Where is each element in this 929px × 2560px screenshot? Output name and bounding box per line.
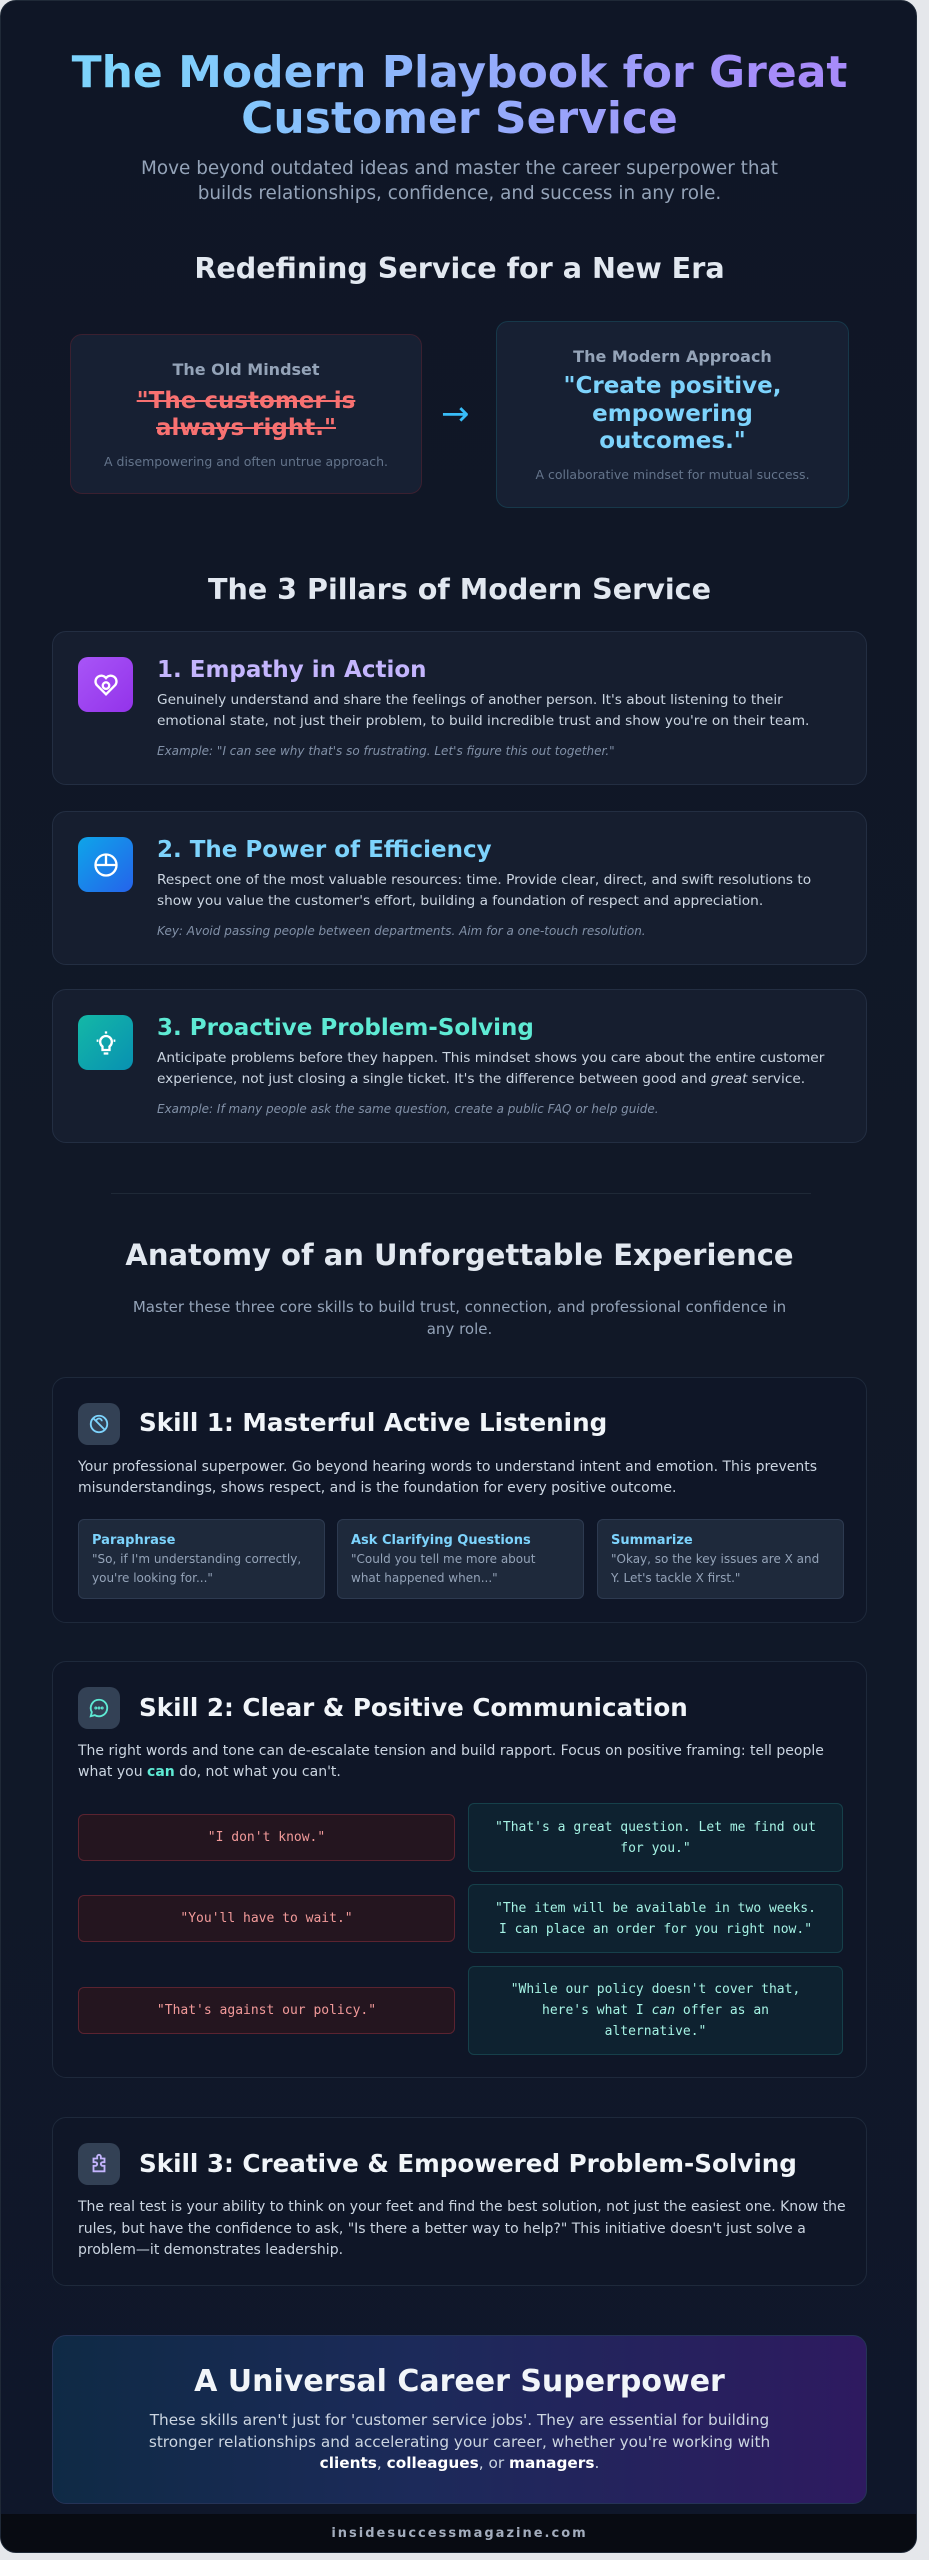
box: paraphrase: Paraphrase [92,1533,175,1548]
panel: pillar 2: Respect one of the most valuable resources: time. Provide clear, direct, and swift resolutions to show you value the customer's effort, building a foundation of respect and appreciation. [157,872,811,909]
title: Customer Service [241,93,678,144]
subtitle: Move beyond outdated ideas and master the career superpower that [141,158,778,179]
box: clarifying [337,1519,584,1599]
icon: chat [78,1687,120,1729]
panel: pillar 3 [52,989,867,1143]
heading: pillars: The 3 Pillars of Modern Service [208,572,711,606]
panel: skill 2: "While our policy doesn't cover that, here's what I can offer as an alternative." [511,1982,800,2039]
panel: universal superpower [52,2335,867,2504]
panel: skill 2 [52,1661,867,2078]
row 1 [78,1814,455,1861]
icon: ear [78,1403,120,1445]
panel: pillar 1 [52,631,867,785]
modern quote: empowering [592,400,753,426]
modern quote [564,373,781,454]
panel: pillar 3: Example: If many people ask the same question, create a public FAQ or help guide. [157,1102,659,1116]
panel: pillar 1: Example: "I can see why that's so frustrating. Let's figure this out together." [157,744,615,758]
panel: skill 3 [52,2117,867,2286]
panel: skill 1: Skill 1: Masterful Active Listening [139,1408,607,1437]
panel: skill 3: Skill 3: Creative & Empowered Problem-Solving [139,2149,797,2178]
panel: modern approach: A collaborative mindset for mutual success. [535,467,810,482]
panel: skill 2: "The item will be available in two weeks. I can place an order for you right now." [495,1900,816,1936]
row 3: "That's against our policy." [157,2003,376,2018]
arrow: → [441,394,470,434]
icon: heart [78,657,133,712]
box: summarize: "Okay, so the key issues are X and [611,1552,819,1566]
panel: skill 2: "That's a great question. Let me find out for you." [495,1820,816,1856]
anatomy subtitle: Master these three core skills to build trust, connection, and professional confidence in any role. [133,1298,786,1338]
row 2 [78,1895,455,1942]
panel: skill 2: Skill 2: Clear & Positive Communication [139,1693,688,1722]
icon: puzzle [78,2143,120,2185]
heading: redefining: Redefining Service for a New Era [194,251,725,285]
panel: modern approach [496,321,849,508]
panel: old mindset [70,334,422,494]
panel: skill 2: The right words and tone can de-escalate tension and build rapport. Focus on positive framing: tell people what you can do, not what you can't. [78,1743,824,1780]
row 2: "You'll have to wait." [180,1911,353,1926]
icon: clock [78,837,133,892]
old quote: "The customer is [137,388,355,414]
panel: old mindset: A disempowering and often untrue approach. [104,454,388,469]
panel: pillar 3: Anticipate problems before they happen. This mindset shows you care about the entire customer experience, not just closing a single ticket. It's the difference between good and great service. [157,1050,824,1087]
row 1: "I don't know." [208,1830,325,1845]
panel: universal superpower: These skills aren't just for 'customer service jobs'. They are essential for building stronger relationships and accelerating your career, whether you're working with clients, colleagues, or managers. [149,2411,770,2472]
old quote [136,388,356,441]
modern quote: outcomes." [599,428,746,454]
box: clarifying: what happened when..." [351,1571,498,1585]
panel: old mindset: The Old Mindset [172,360,320,379]
panel: pillar 2: 2. The Power of Efficiency [157,837,492,863]
title [1,50,918,142]
box: clarifying: Ask Clarifying Questions [351,1533,531,1548]
panel: pillar 2: Key: Avoid passing people between departments. Aim for a one-touch resolution. [157,924,646,938]
panel: pillar 2 [52,811,867,965]
panel: pillar 1: 1. Empathy in Action [157,657,427,683]
panel: pillar 3: 3. Proactive Problem-Solving [157,1015,534,1041]
box: summarize: Summarize [611,1533,693,1548]
subtitle [141,158,778,204]
heading: anatomy: Anatomy of an Unforgettable Experience [125,1238,794,1272]
modern quote: "Create positive, [564,373,781,399]
box: summarize [597,1519,844,1599]
box: paraphrase: you're looking for..." [92,1571,213,1585]
box: clarifying: "Could you tell me more about [351,1552,535,1566]
panel: skill 3: The real test is your ability to think on your feet and find the best solution, not just the easiest one. Know the rules, but have the confidence to ask, "Is there a better way to help?" This initiative doesn't just solve a problem—it demonstrates leadership. [78,2199,846,2258]
panel: skill 1 [52,1377,867,1623]
footer: insidesuccessmagazine.com [331,2526,588,2541]
title: The Modern Playbook for Great [72,47,847,98]
box: paraphrase: "So, if I'm understanding correctly, [92,1552,301,1566]
footer [1,2514,918,2554]
panel: skill 1: Your professional superpower. Go beyond hearing words to understand intent and emotion. This prevents misunderstandings, shows respect, and is the foundation for every positive outcome. [78,1459,817,1496]
box: paraphrase [78,1519,325,1599]
box: summarize: Y. Let's tackle X first." [611,1571,740,1585]
subtitle: builds relationships, confidence, and success in any role. [198,183,721,204]
panel: pillar 1: Genuinely understand and share the feelings of another person. It's about listening to their emotional state, not just their problem, to build incredible trust and show you're on their team. [157,692,809,729]
panel: universal superpower: A Universal Career Superpower [194,2364,725,2399]
row 3 [78,1987,455,2034]
icon: lightbulb [78,1015,133,1070]
panel: modern approach: The Modern Approach [573,347,772,366]
old quote: always right." [156,415,336,441]
